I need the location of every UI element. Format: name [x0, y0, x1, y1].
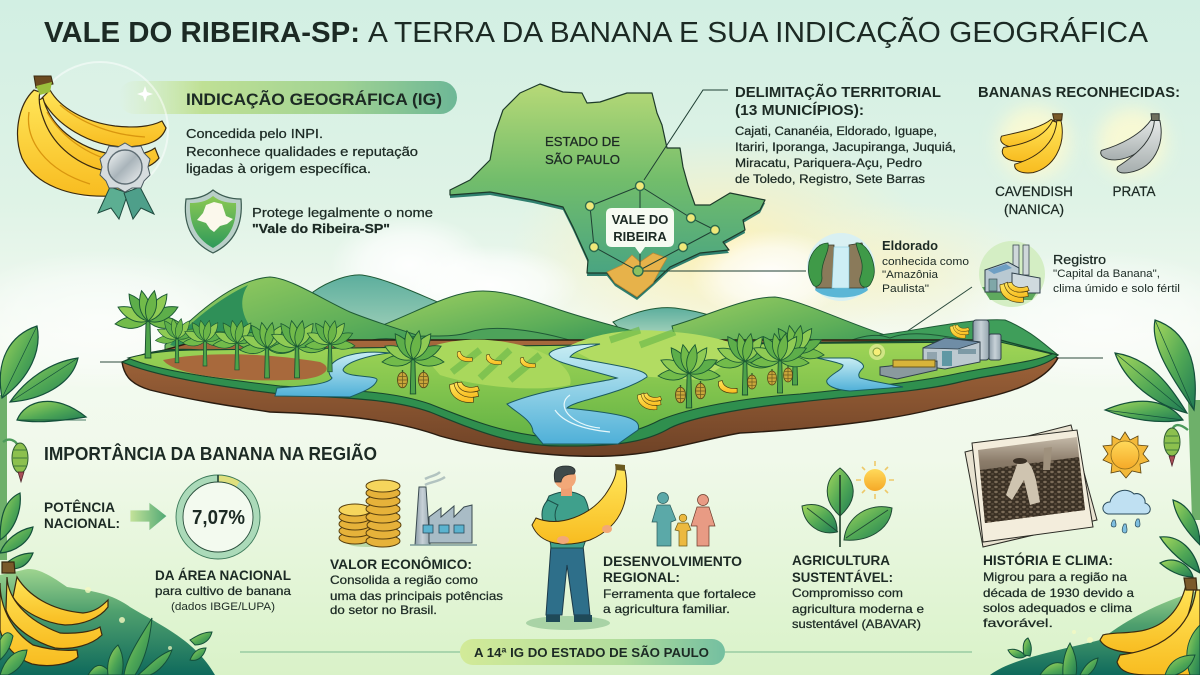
icon: factory [410, 472, 477, 545]
banana hands [398, 366, 792, 403]
text: Ferramenta que fortalece [603, 587, 756, 601]
text: delimitacao territorial: de Toledo, Registro, Sete Barras [735, 174, 925, 186]
label: registro: clima úmido e solo fértil [1053, 283, 1180, 295]
text: Migrou para a região na [983, 570, 1127, 584]
text: agricultura moderna e [792, 602, 924, 616]
hills [165, 275, 1058, 365]
mound [990, 590, 1200, 675]
text [603, 554, 756, 616]
caption: para cultivo de banana [155, 584, 291, 598]
text: delimitacao territorial: Miracatu, Pariquera-Açu, Pedro [735, 158, 922, 170]
panel: eldorado [807, 233, 969, 301]
text: SUSTENTÁVEL: [792, 570, 893, 585]
label: registro: Registro [1053, 252, 1106, 267]
foliage: left side [0, 326, 215, 675]
state label: ESTADO DE [545, 135, 620, 149]
text: protege [252, 205, 433, 236]
label: cavendish: CAVENDISH [995, 184, 1073, 199]
panel: agricultura sustentavel [792, 461, 924, 631]
title: VALE DO RIBEIRA-SP: [44, 17, 360, 49]
text: REGIONAL: [603, 570, 680, 585]
text: VALOR ECONÔMICO: [330, 557, 472, 572]
leaves bottom [0, 618, 212, 675]
label: registro: "Capital da Banana", [1053, 268, 1160, 280]
text: concedida [186, 126, 418, 176]
text: HISTÓRIA E CLIMA: [983, 553, 1113, 568]
stat: potencia nacional [44, 475, 291, 613]
label: eldorado: conhecida como [882, 256, 969, 268]
leaves bottom [1008, 625, 1200, 675]
panel: indicacao geografica [18, 62, 457, 253]
icon: old photo [965, 425, 1097, 547]
banana hand [12, 443, 28, 482]
state label: SÃO PAULO [545, 153, 620, 167]
text: delimitacao territorial: Itariri, Iporanga, Jacupiranga, Juquiá, [735, 142, 956, 154]
text: delimitacao territorial: Cajati, Cananéia, Eldorado, Iguape, [735, 126, 937, 138]
title: A TERRA DA BANANA E SUA INDICAÇÃO GEOGRÁFICA [368, 15, 1149, 49]
panel: bananas reconhecidas [978, 85, 1180, 217]
illustration: landscape island [100, 275, 1103, 456]
text: DESENVOLVIMENTO [603, 554, 742, 569]
text: sustentável (ABAVAR) [792, 617, 921, 631]
text [330, 557, 503, 617]
text: concedida: ligadas à origem específica. [186, 161, 371, 176]
label: eldorado [882, 238, 969, 295]
donut [176, 475, 260, 559]
label: eldorado: Eldorado [882, 238, 938, 253]
icon: waterfall [807, 233, 875, 301]
light field [420, 340, 571, 388]
heading: importancia: IMPORTÂNCIA DA BANANA NA REGIÃO [44, 443, 377, 464]
text: solos adequados e clima [983, 601, 1132, 615]
text [983, 553, 1134, 630]
label: eldorado: Paulista" [882, 283, 929, 295]
icon: bananas with medal [18, 62, 168, 219]
vale do ribeira region [607, 253, 667, 297]
footer banner [240, 639, 972, 665]
text: concedida: Reconhece qualidades e reputação [186, 144, 418, 159]
grass base [122, 340, 1058, 446]
text [792, 553, 924, 631]
icon: sprout and sun [802, 461, 894, 547]
text: AGRICULTURA [792, 553, 890, 568]
label: POTÊNCIA [44, 500, 115, 515]
text: concedida: Concedida pelo INPI. [186, 126, 323, 141]
heading pill: INDICAÇÃO GEOGRÁFICA (IG) [186, 89, 442, 109]
network nodes [586, 182, 720, 276]
grass top surface [128, 342, 1052, 438]
text: do setor no Brasil. [330, 603, 437, 617]
label: registro [1053, 252, 1180, 295]
footer banner: A 14ª IG DO ESTADO DE SÃO PAULO [474, 645, 709, 660]
caption: DA ÁREA NACIONAL [155, 568, 291, 583]
heading: BANANAS RECONHECIDAS: [978, 85, 1180, 101]
vale label [606, 208, 674, 254]
soil [122, 340, 1058, 456]
river right [817, 358, 903, 391]
text: favorável. [983, 616, 1053, 630]
label: cavendish: (NANICA) [1004, 202, 1064, 217]
label: eldorado: "Amazônia [882, 269, 939, 281]
text: a agricultura familiar. [603, 602, 730, 616]
bananas [1100, 578, 1200, 675]
icon: factory with bananas [979, 241, 1045, 307]
bananas [0, 562, 108, 666]
text: delimitacao territorial [735, 83, 956, 186]
icon: prata [1098, 108, 1166, 176]
map: estado de sao paulo [450, 84, 806, 300]
label: NACIONAL: [44, 516, 120, 531]
text: uma das principais potências [330, 589, 503, 603]
foliage: right side [990, 320, 1200, 675]
icon: man with banana [526, 464, 627, 630]
mound [0, 569, 215, 675]
heading pill [118, 81, 457, 114]
label: cavendish [995, 184, 1073, 217]
text: Compromisso com [792, 586, 903, 600]
icon: coins [339, 480, 401, 547]
donut: 7,07% [192, 507, 245, 529]
trees [115, 290, 824, 408]
arrow [130, 502, 167, 531]
panel: registro [979, 241, 1180, 307]
panel: desenvolvimento regional [526, 464, 756, 630]
bushes [340, 328, 590, 362]
banana hand [1164, 428, 1180, 466]
vale label: VALE DO [612, 212, 668, 227]
panel: valor economico [330, 472, 503, 617]
factory [869, 320, 1001, 379]
leaves [1105, 320, 1200, 577]
icon: family [652, 492, 715, 546]
text: protege: "Vale do Ribeira-SP" [252, 221, 390, 236]
state label [545, 135, 620, 167]
panel: historia e clima [965, 425, 1150, 630]
river left [275, 352, 390, 397]
icon: sun [1103, 432, 1149, 478]
icon: rain cloud [1103, 490, 1150, 533]
leaves [0, 326, 86, 569]
brown plantation soil [163, 354, 327, 380]
label: prata: PRATA [1112, 184, 1156, 199]
text: delimitacao territorial: (13 MUNICÍPIOS): [735, 102, 864, 119]
network lines [590, 90, 806, 271]
caption [155, 568, 291, 613]
caption: (dados IBGE/LUPA) [171, 601, 275, 613]
label [44, 500, 120, 531]
river center [507, 344, 647, 444]
text: década de 1930 devido a [983, 586, 1134, 600]
icon: shield [185, 190, 241, 253]
text: protege: Protege legalmente o nome [252, 205, 433, 220]
vale label: RIBEIRA [613, 229, 667, 244]
text: Consolida a região como [330, 573, 478, 587]
loose bananas [450, 351, 737, 410]
title [44, 15, 1149, 49]
icon: cavendish [998, 106, 1070, 178]
text: delimitacao territorial: DELIMITAÇÃO TERRITORIAL [735, 83, 941, 101]
